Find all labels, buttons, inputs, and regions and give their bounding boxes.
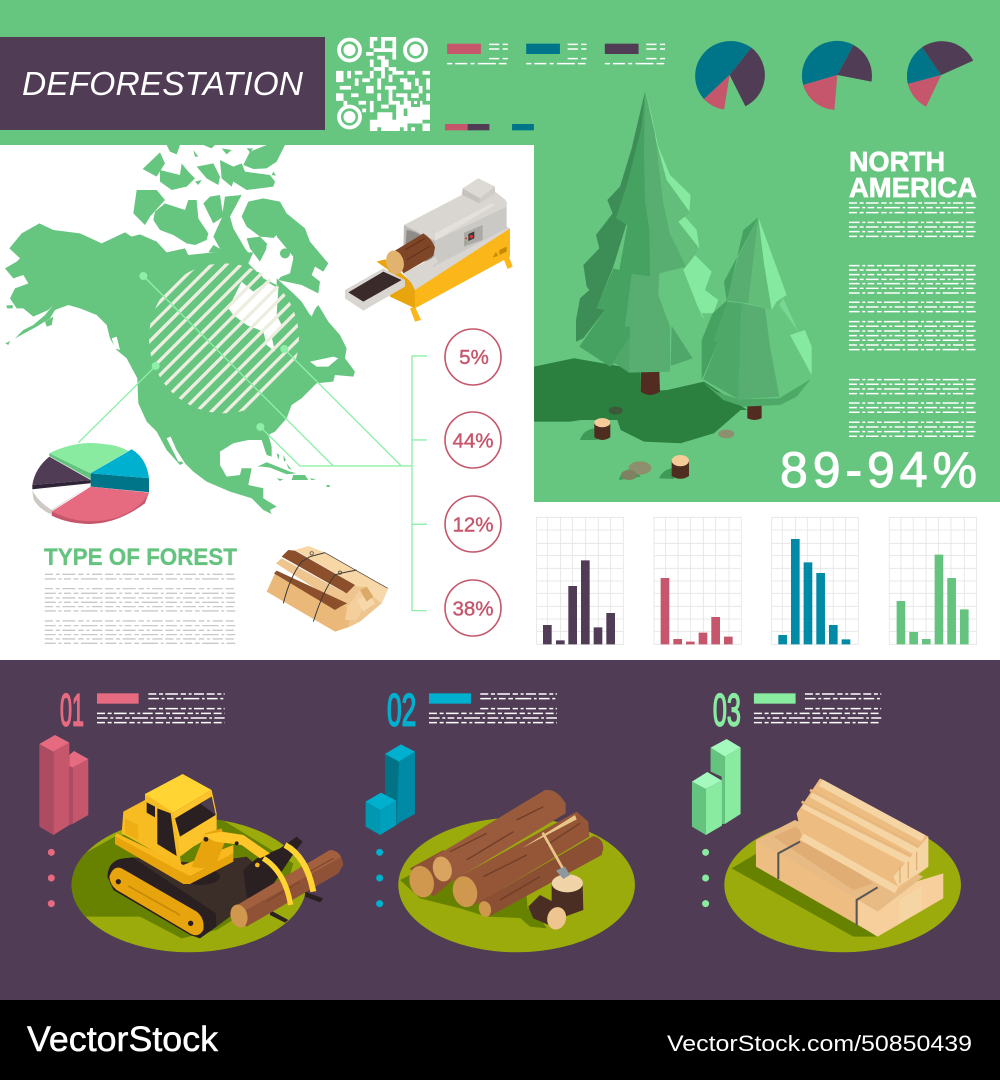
chart 2 — [654, 517, 741, 644]
chart 3 — [772, 517, 858, 644]
trees group — [576, 92, 812, 420]
step 1 feller buncher machine — [67, 774, 343, 938]
step 1 header: 01 — [60, 685, 84, 736]
step 3 dots — [702, 849, 709, 907]
circle 38%: 38% — [452, 598, 494, 620]
pie chart 1 — [695, 41, 765, 110]
step 3 isometric bars — [692, 739, 741, 835]
panel: purple steps area — [0, 660, 1000, 1000]
tree stumps and stones — [580, 407, 734, 480]
map panel contents — [5, 145, 427, 611]
title banner: DEFORESTATION — [22, 66, 304, 103]
step 1 header — [60, 685, 225, 736]
ground disc 2 — [398, 818, 635, 952]
large tree trunk — [641, 372, 660, 395]
percentage circles — [445, 329, 501, 636]
pie chart 3 — [907, 41, 973, 107]
circle 12%: 12% — [452, 514, 494, 536]
legend item: teal — [526, 44, 588, 64]
step 2 header: 02 — [387, 685, 416, 736]
step 2 logs and axe — [400, 790, 603, 932]
title banner — [0, 37, 325, 130]
heading: North America: NORTH — [849, 146, 945, 177]
steps section — [39, 685, 881, 952]
small tree trunk — [747, 405, 762, 420]
bar charts — [537, 517, 977, 644]
watermark bar — [0, 1000, 1000, 1080]
placeholder body text — [45, 574, 235, 643]
forest illustration — [534, 92, 812, 480]
step 2 header — [387, 685, 557, 736]
small colour swatches — [445, 124, 534, 130]
step 3 lumber stack — [724, 778, 961, 952]
watermark bar: VectorStock.com/50850439 — [667, 1031, 972, 1056]
step 2 dots — [376, 849, 383, 907]
legend item: pink — [447, 44, 509, 64]
log processing machine — [345, 178, 513, 322]
step 1 isometric bars — [39, 735, 88, 835]
step 3 header — [713, 685, 881, 736]
large spruce tree — [576, 92, 718, 373]
ground disc 1 — [72, 818, 306, 952]
hatched deforested zone — [149, 263, 299, 414]
step 3 header: 03 — [713, 685, 741, 736]
heading: North America — [849, 146, 977, 203]
circle 12% — [445, 496, 501, 552]
circle 5% — [445, 329, 501, 385]
legend row — [445, 41, 973, 130]
chart 4 — [889, 517, 977, 644]
panel: white chart area — [534, 502, 1000, 660]
circle 44% — [445, 412, 501, 468]
watermark bar: VectorStock — [27, 1020, 219, 1059]
small spruce tree — [702, 217, 812, 407]
legend item: purple — [605, 44, 666, 64]
panel: white map area — [0, 145, 534, 660]
chart 1 — [537, 517, 623, 644]
tree shadow — [534, 358, 747, 443]
bundle of firewood — [267, 546, 388, 632]
connector lines — [78, 276, 427, 611]
step 2 isometric bars — [366, 744, 415, 835]
circle 5%: 5% — [459, 346, 489, 369]
connector dots — [139, 272, 288, 431]
big percentage: 89-94% — [780, 442, 977, 498]
background: green header and forest panel — [0, 0, 1000, 502]
heading: North America: AMERICA — [849, 172, 977, 203]
circle 38% — [445, 580, 501, 636]
pie chart 2 — [802, 41, 872, 110]
QR code — [336, 37, 430, 131]
circle 44%: 44% — [452, 430, 494, 452]
isometric pie chart — [32, 443, 149, 524]
placeholder text blocks — [849, 203, 976, 436]
bays — [112, 235, 338, 462]
step 1 dots — [48, 849, 55, 907]
map of North America — [5, 145, 355, 514]
heading: type of forest: TYPE OF FOREST — [44, 544, 237, 571]
